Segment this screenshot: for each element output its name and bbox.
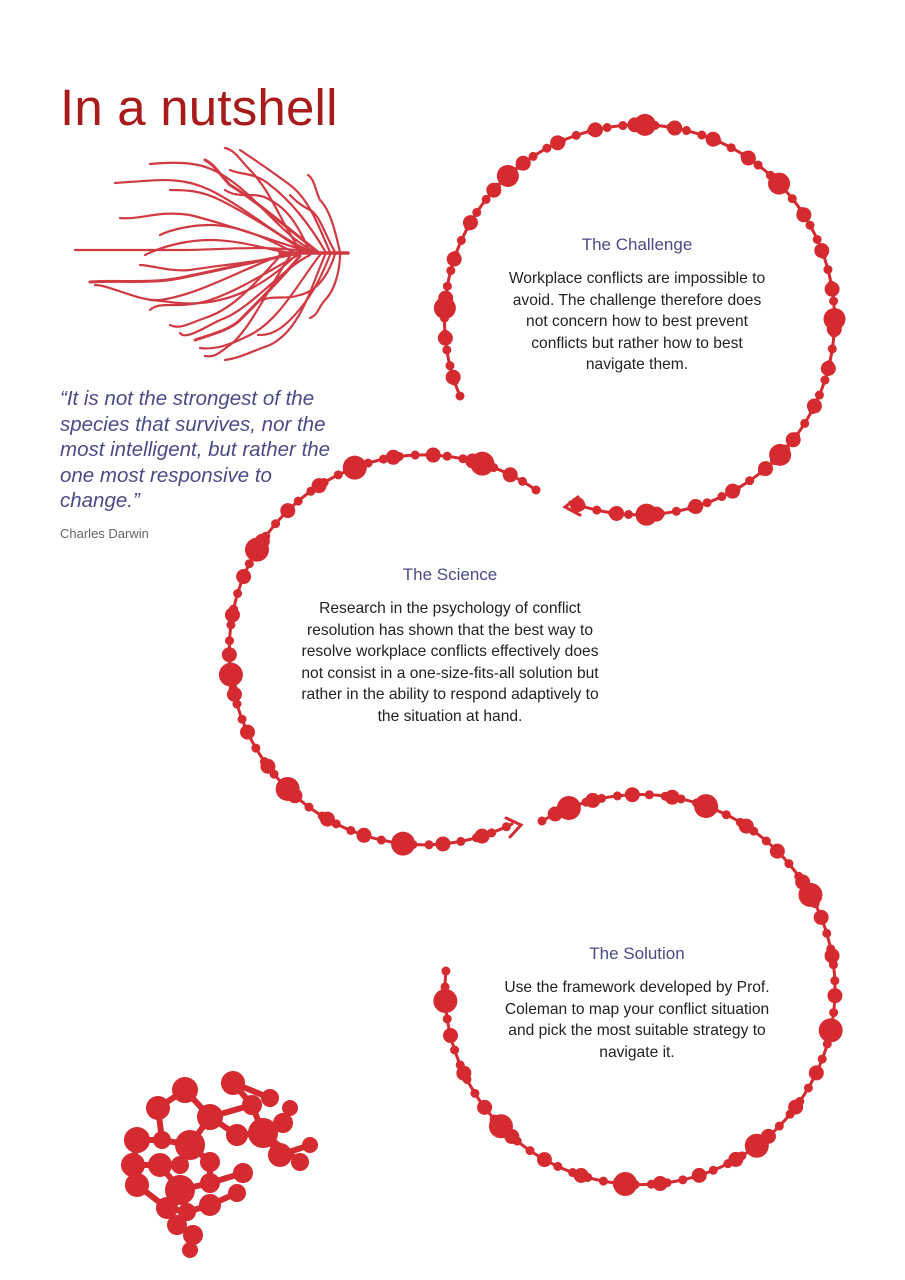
text: the solution: Use the framework developed by Prof. [504, 979, 770, 996]
text: the challenge: avoid. The challenge therefore does [513, 292, 761, 309]
quote: species that survives, nor the [60, 412, 326, 436]
title: In a nutshell [60, 79, 338, 136]
quote: change.” [60, 489, 140, 512]
text: the science [301, 565, 599, 725]
text: the challenge: navigate them. [586, 356, 688, 373]
text: the science: the situation at hand. [378, 708, 522, 725]
text: the solution: Coleman to map your conflict situation [505, 1001, 769, 1018]
quote: one most responsive to [60, 464, 272, 486]
text: the science: resolution has shown that the best way to [307, 622, 593, 639]
icon: brain [124, 1074, 315, 1255]
text: the challenge: conflicts but rather how to best [531, 335, 743, 352]
text: the challenge: not concern how to best prevent [526, 313, 748, 330]
circle: solution beaded arc [445, 795, 835, 1185]
quote: most intelligent, but rather the [60, 438, 330, 461]
quote: “It is not the strongest of the [60, 387, 314, 410]
text: the science: Research in the psychology of conflict [319, 600, 581, 617]
circle: challenge beaded arc [444, 125, 834, 515]
text: the challenge [509, 235, 765, 373]
text: the solution [504, 944, 770, 1061]
circle: science beaded arc [229, 455, 536, 845]
text: the science: not consist in a one-size-fits-all solution but [301, 665, 599, 682]
quote [60, 387, 330, 512]
text: the science: The Science [403, 565, 497, 584]
text: the challenge: The Challenge [582, 235, 692, 254]
text: the challenge: Workplace conflicts are impossible to [509, 270, 765, 287]
quote author: Charles Darwin [60, 526, 149, 541]
text: the science: rather in the ability to respond adaptively to [301, 686, 599, 703]
arrow: science to solution [506, 818, 521, 837]
text: the solution: and pick the most suitable strategy to [508, 1022, 766, 1039]
arrow: challenge to science [565, 497, 580, 515]
text: the solution: navigate it. [599, 1044, 675, 1061]
text: the science: resolve workplace conflicts effectively does [302, 643, 598, 660]
text: the solution: The Solution [589, 944, 685, 963]
